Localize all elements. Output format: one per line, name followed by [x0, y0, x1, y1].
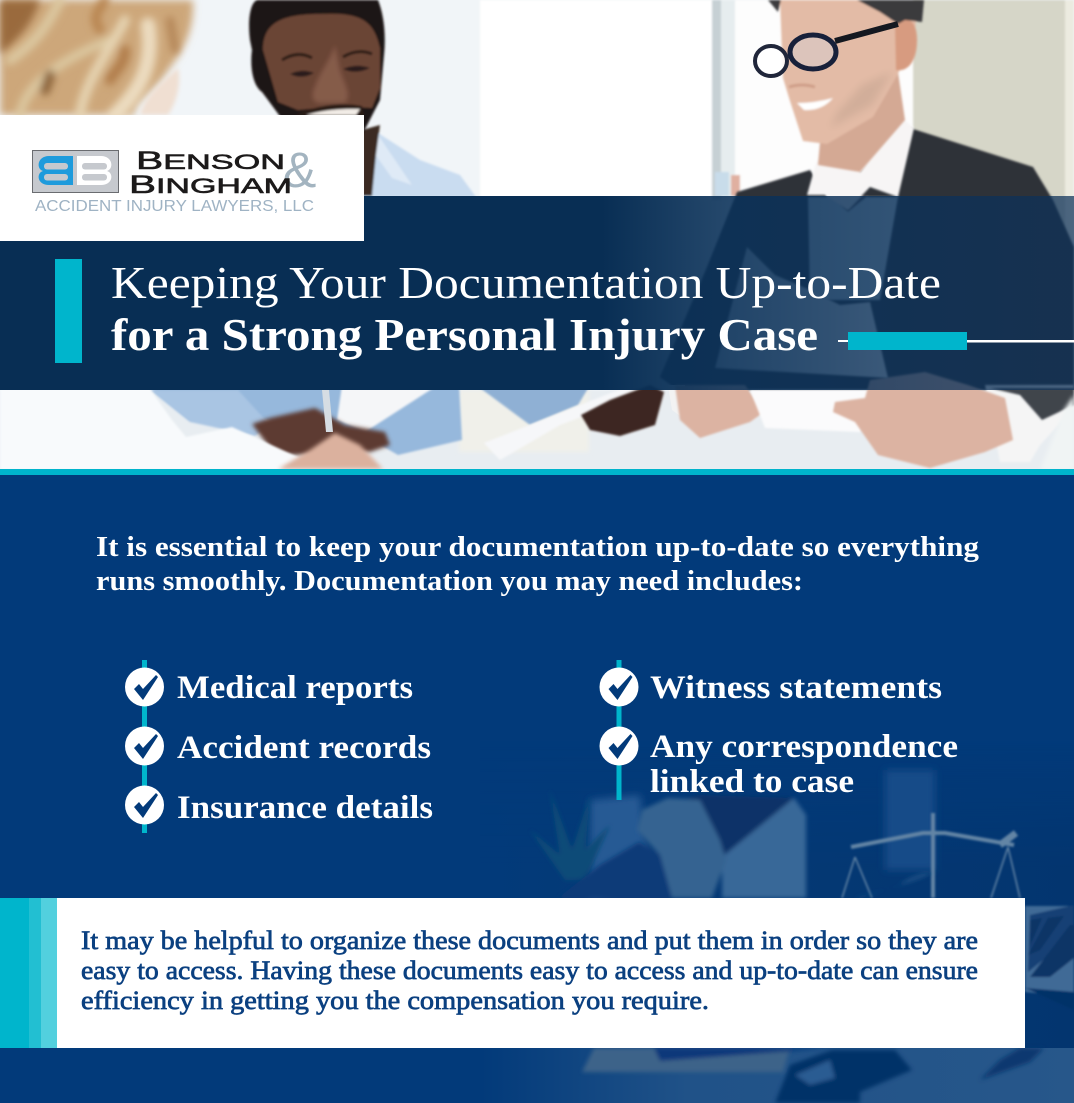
callout text: It may be helpful to organize these documents and put them in order so they are	[81, 926, 978, 955]
blonde hair, left	[0, 0, 193, 115]
right hand, man on right	[833, 372, 1013, 468]
logo tagline: ACCIDENT INJURY LAWYERS, LLC	[35, 198, 314, 215]
title: for a Strong Personal Injury Case	[111, 309, 818, 360]
dark hand, left	[252, 408, 390, 455]
item: witness statements: Witness statements	[650, 670, 942, 706]
logo wordmark: B ENSON	[136, 147, 285, 175]
item: any correspondence: linked to case	[650, 764, 854, 800]
long paper	[484, 385, 640, 460]
title: Keeping Your Documentation Up-to-Date	[111, 257, 941, 308]
title accent bar	[55, 259, 82, 363]
intro text: It is essential to keep your documentation up-to-date so everything	[96, 531, 980, 563]
handshake	[558, 795, 806, 898]
callout panel	[0, 898, 1025, 1048]
right cuff and sleeve	[985, 385, 1074, 462]
checklist: right column	[600, 660, 958, 800]
left hand, man on right	[675, 385, 764, 438]
callout text	[81, 926, 978, 1015]
glasses	[755, 24, 898, 76]
title	[111, 257, 941, 360]
intro text	[96, 531, 980, 597]
intro text: runs smoothly. Documentation you may need includes:	[96, 565, 803, 597]
item: medical reports: Medical reports	[177, 670, 413, 706]
header photo: people reviewing documents	[0, 0, 1074, 470]
office background	[480, 0, 1074, 240]
ampersand: &	[283, 142, 316, 198]
laptop	[1025, 905, 1074, 1010]
light wall behind plant	[590, 795, 650, 898]
dark hand, right	[581, 385, 664, 436]
checklist: left column	[125, 660, 433, 833]
item: accident records: Accident records	[177, 730, 431, 766]
white cuff, centre	[668, 385, 688, 422]
bottom table items	[582, 1048, 1044, 1103]
item: insurance details	[125, 786, 433, 826]
paper in hands, behind band	[715, 247, 888, 378]
scales of justice	[842, 813, 1020, 898]
paper, left	[337, 385, 438, 432]
title rule	[838, 332, 1074, 350]
faint background photo: handshake, scales and laptop	[536, 768, 1074, 1103]
man on left: shirt	[360, 125, 476, 197]
paper, right	[750, 390, 880, 432]
white sleeve, foreground	[0, 385, 300, 470]
item: any correspondence: Any correspondence	[650, 729, 958, 765]
logo wordmark: B INGHAM	[129, 171, 292, 199]
item: any correspondence	[600, 726, 958, 800]
blurred foreground shape	[1040, 395, 1074, 470]
man on left: head	[249, 0, 385, 135]
plant	[530, 790, 610, 880]
logo mark: BB	[32, 150, 118, 192]
light column	[885, 770, 935, 870]
teal divider	[0, 469, 1074, 475]
man on right: suit	[660, 128, 1074, 420]
man on right: shirt and collar	[807, 118, 914, 300]
logo panel	[0, 115, 364, 241]
man on right: head	[768, 0, 924, 172]
table and documents	[0, 372, 1074, 470]
callout text: easy to access. Having these documents easy to access and up-to-date can ensure	[81, 956, 978, 985]
pale hand, foreground	[278, 433, 383, 469]
logo wordmark	[129, 147, 292, 199]
callout text: efficiency in getting you the compensation you require.	[81, 986, 709, 1015]
item: insurance details: Insurance details	[177, 790, 433, 826]
title band	[0, 196, 1074, 390]
blue shirt sleeves	[147, 385, 462, 455]
